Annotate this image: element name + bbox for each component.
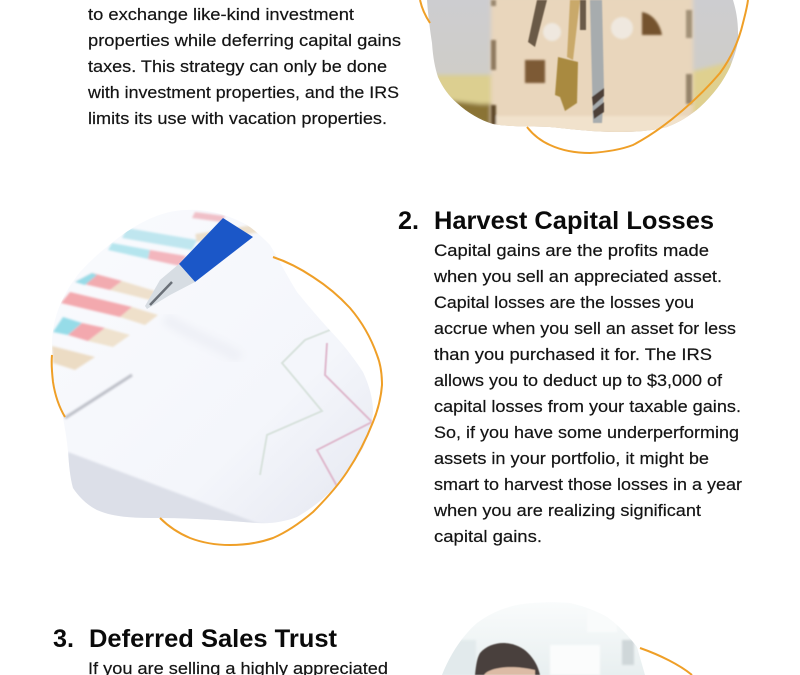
text block: harvest capital losses: smart to harvest those losses in a year (434, 475, 742, 494)
text block: harvest capital losses: allows you to deduct up to $3,000 of (434, 371, 722, 390)
heading: 2. Harvest Capital Losses: 2. (398, 207, 419, 235)
icon: dark key (528, 0, 547, 47)
panel: 1031 exchange text (87, 5, 401, 128)
panel: 1031 exchange text: properties while deferring capital gains (88, 31, 401, 50)
photo: businessman (442, 613, 645, 675)
bar chart on paper (52, 212, 260, 370)
icon: gold key (555, 0, 586, 111)
panel: 1031 exchange text: with investment properties, and the IRS (87, 83, 399, 102)
axis label on paper (65, 375, 132, 418)
text block: harvest capital losses: assets in your portfolio, it might be (434, 449, 709, 468)
icon: silver key (590, 0, 604, 123)
icon: orange outline around businessman photo (640, 648, 692, 675)
panel: 1031 exchange text: limits its use with vacation properties. (88, 109, 387, 128)
text block: harvest capital losses (433, 241, 742, 546)
document edge strip (68, 452, 256, 523)
text block: harvest capital losses: Capital gains are the profits made (434, 241, 709, 260)
heading: 3. Deferred Sales Trust: Deferred Sales Trust (89, 625, 338, 653)
panel: 1031 exchange text: to exchange like-kind investment (88, 5, 354, 24)
photo: financial charts and blue pen (52, 210, 373, 524)
panel: 1031 exchange text: taxes. This strategy can only be done (88, 57, 387, 76)
icon: orange outline around chart photo (52, 257, 382, 545)
text block: harvest capital losses: than you purchased it for. The IRS (434, 345, 712, 364)
text block: harvest capital losses: capital gains. (434, 527, 542, 546)
icon: orange outline around keys photo (420, 0, 748, 153)
heading: 2. Harvest Capital Losses: Harvest Capital Losses (434, 207, 714, 235)
text block: harvest capital losses: when you sell an appreciated asset. (433, 267, 722, 286)
pen shadow on paper (165, 318, 240, 358)
text block: harvest capital losses: accrue when you sell an asset for less (434, 319, 736, 338)
icon: blue pen (145, 218, 253, 309)
heading: 3. Deferred Sales Trust: 3. (53, 625, 74, 653)
text block: harvest capital losses: capital losses from your taxable gains. (434, 397, 741, 416)
photo: keys in front of house (427, 0, 738, 132)
text block: harvest capital losses: Capital losses are the losses you (434, 293, 694, 312)
text block: harvest capital losses: when you are realizing significant (433, 501, 701, 520)
icon: man's head and hair (475, 643, 540, 675)
text block: harvest capital losses: So, if you have some underperforming (434, 423, 739, 442)
line chart on paper (260, 330, 372, 488)
